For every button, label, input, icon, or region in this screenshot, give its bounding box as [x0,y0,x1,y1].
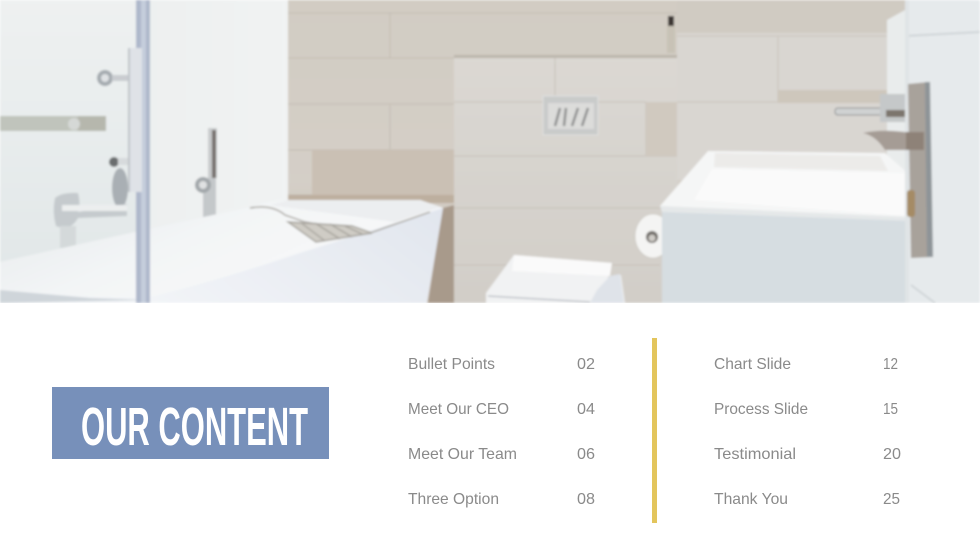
right wall [677,0,907,180]
wire caddy [250,207,430,242]
contents column: left: Meet Our Team [408,446,517,463]
contents column: left: Meet Our CEO [408,401,509,418]
hand shower [195,128,217,217]
contents column: right: Chart Slide [714,356,791,373]
glass door rail [128,0,150,303]
yellow divider [652,338,657,523]
contents column: left [408,356,595,508]
title text: OUR CONTENT [81,397,308,457]
contents column: left: 06 [577,446,595,463]
vanity cabinet [660,151,910,303]
back tile wall [288,0,688,303]
contents column: right: Thank You [714,491,788,508]
contents column: left: 02 [577,356,595,373]
bottle on ledge [667,16,675,53]
contents column: left: Three Option [408,491,499,508]
contents column: right: 12 [883,356,898,373]
bath spout [54,193,127,248]
contents column: right: 20 [883,446,901,463]
bathtub [0,200,454,303]
door handle plate [863,82,933,258]
contents column: right: Process Slide [714,401,808,418]
door [905,0,980,303]
flush plate [543,96,598,135]
photo: bathroom interior [0,0,980,303]
white wall left [150,0,288,228]
wall fittings [97,70,129,208]
contents column: left: Bullet Points [408,356,495,373]
contents column: left: 04 [577,401,595,418]
toilet paper roll [634,214,663,258]
towel bar [0,116,106,131]
toilet [486,255,625,303]
contents column: right [714,356,901,508]
partition wall [454,55,678,303]
contents column: right: 15 [883,401,898,418]
contents column: right: 25 [883,491,900,508]
title banner [52,387,329,459]
contents column: left: 08 [577,491,595,508]
contents column: right: Testimonial [714,446,796,463]
taps [835,94,906,122]
